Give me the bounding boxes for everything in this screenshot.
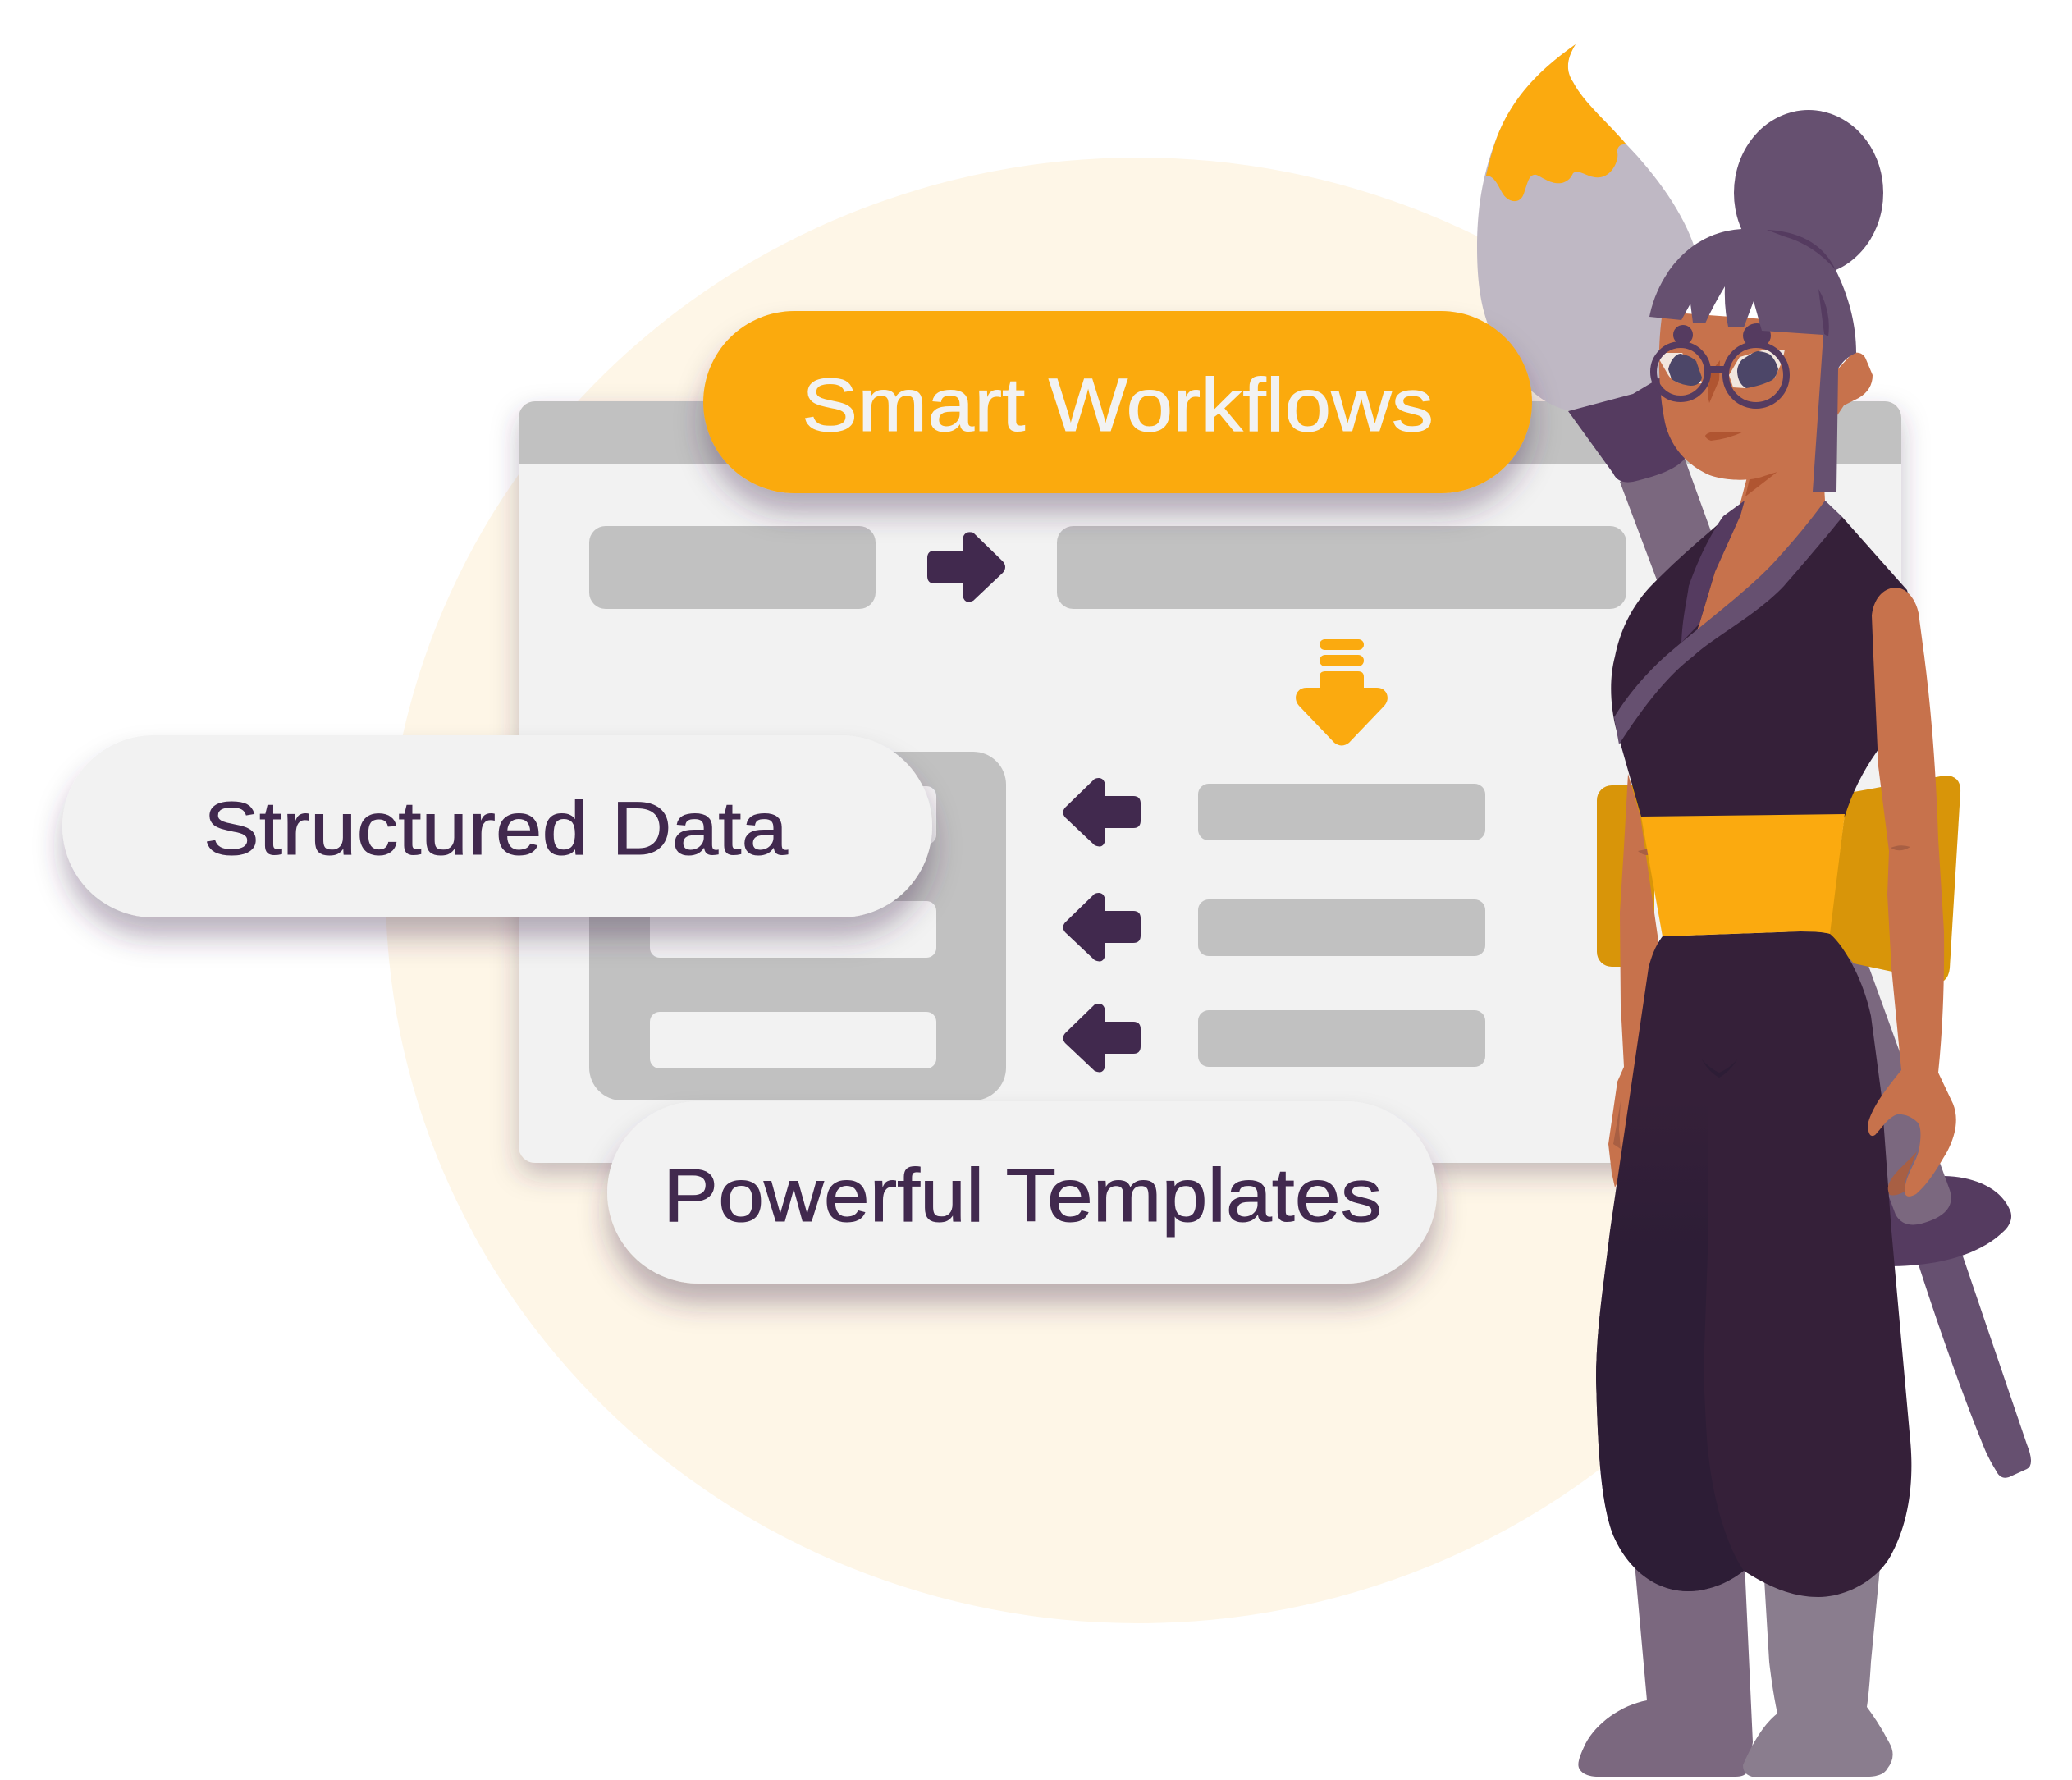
outer collar [1614,501,1842,744]
right eye [1729,350,1785,388]
elbow mark [1891,845,1910,850]
pill: Powerful Templates: Powerful Templates [663,1154,1382,1238]
window title bar [519,401,1901,464]
brush bristles [1477,44,1699,410]
nose [1708,360,1720,403]
right boot [1743,1567,1893,1777]
output field 3 [1198,1010,1485,1067]
hair [1649,229,1856,492]
chest and neck [1690,443,1825,648]
output field 1 [1198,784,1485,840]
trouser left leg shade [1596,1100,1744,1591]
pill: Smart Workflows [703,311,1532,493]
hand shadow [1888,1151,1917,1195]
panel: app window [519,401,1901,1163]
arrow: download [1296,639,1388,745]
output field 2 [1198,899,1485,956]
template slot 3 [650,1012,936,1068]
top right field [1057,526,1626,609]
ear [1830,353,1873,420]
arrow: right [927,532,1005,602]
trouser crease [1702,1059,1737,1078]
brush shaft [1620,459,1951,1224]
left eye [1659,353,1703,384]
arrow: left 3 [1063,1004,1141,1072]
character [1568,110,2031,1777]
template slot 1 [650,786,936,844]
left arm [1608,774,1674,1187]
belt [1641,814,1845,936]
trousers [1596,931,1911,1597]
window body [519,401,1901,1163]
arrow: left 2 [1063,893,1141,961]
arrow: left 1 [1063,778,1141,846]
brush paint tip [1486,44,1626,201]
left boot [1578,1563,1753,1777]
sash back right [1829,776,1960,981]
sash back left [1597,785,1654,967]
mouth [1705,432,1744,441]
brush lower handle [1917,1251,2031,1478]
neck shadow [1745,469,1782,496]
robe top [1611,501,1924,817]
pill: Smart Workflows: Smart Workflows [802,364,1434,447]
pill: Structured Data: Structured Data [204,787,789,871]
face [1659,312,1834,480]
right arm and hand [1868,588,1956,1197]
pill: Powerful Templates [607,1101,1437,1284]
brush ferrule [1568,369,1685,483]
pill: Structured Data [62,735,932,917]
template slot 2 [650,901,936,958]
template panel [589,752,1006,1100]
brush guard disc [1871,1176,2011,1266]
background circle [386,158,1891,1623]
hair bun [1734,110,1883,276]
inner collar [1681,501,1745,643]
glasses [1653,323,1786,405]
top left field [589,526,876,609]
